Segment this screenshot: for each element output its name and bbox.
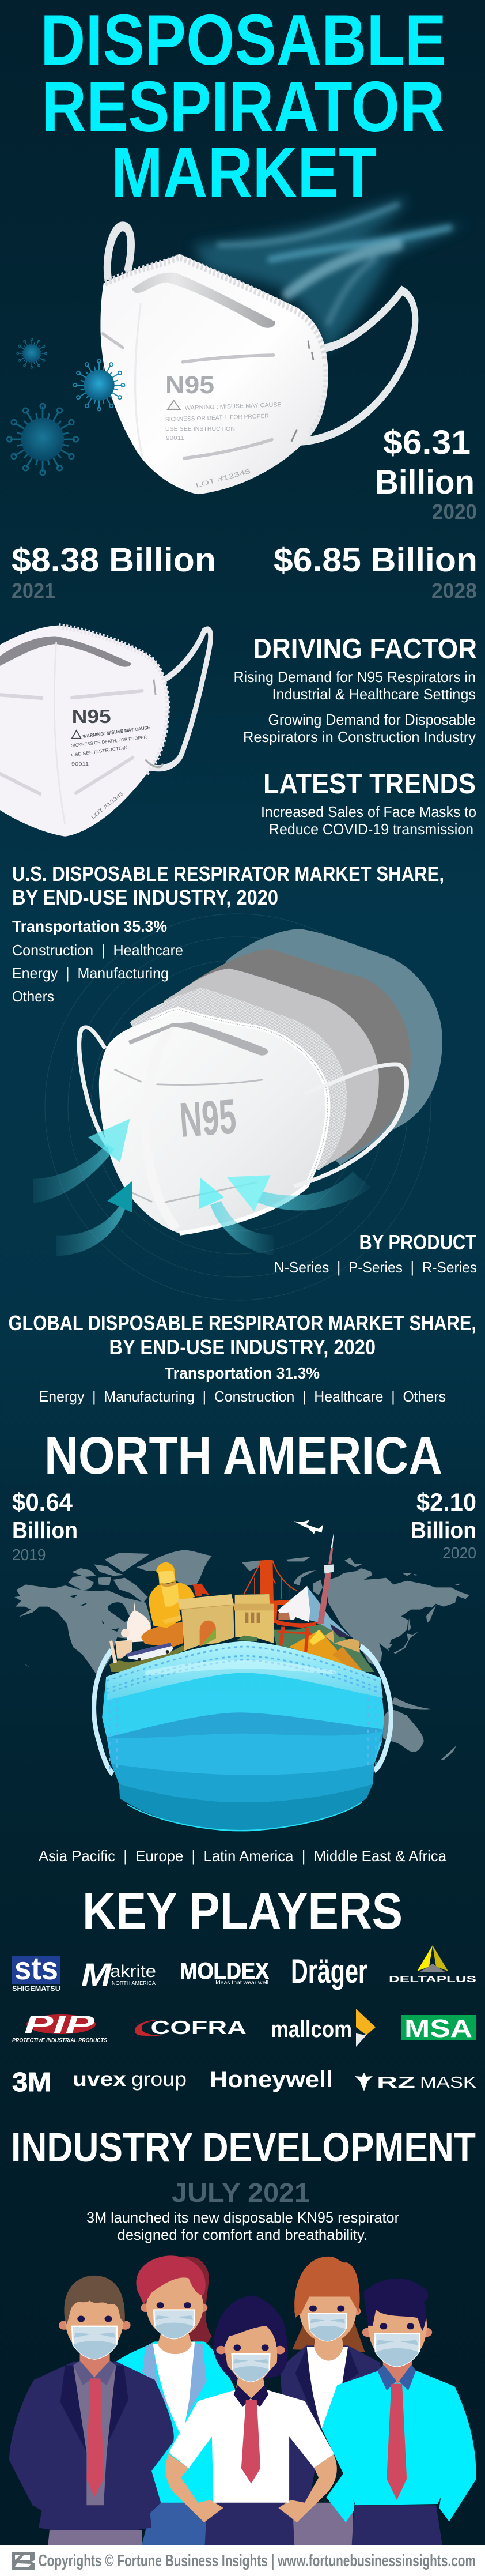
stat: North America 2019: $0.64	[12, 1489, 73, 1516]
logo: STS Shigematsu: SHIGEMATSU	[12, 1984, 60, 1993]
mask label: N95: N95	[178, 1089, 238, 1148]
illustration: blue surgical mask	[102, 1641, 384, 1831]
person: red-haired woman	[115, 2255, 235, 2545]
illustration: N95 mask close-up: WARNING: MISUSE MAY CAUSE	[82, 725, 151, 739]
mask layer: grey filter	[164, 969, 379, 1168]
driving factor: Rising Demand for N95 Respirators in	[234, 668, 476, 686]
ear loop: right	[294, 1064, 407, 1187]
legend: global end-use industries: Energy | Manufacturing | Construction | Healthcare | Others	[39, 1388, 446, 1405]
concentric airflow rings	[45, 914, 431, 1300]
stat: North America 2019: Billion	[12, 1517, 78, 1543]
person: woman in white shirt	[165, 2295, 337, 2545]
stat: 2021 market size: $8.38 Billion	[12, 541, 216, 579]
arrow: airflow upper left	[33, 1118, 130, 1203]
logo: uvex group	[73, 2068, 187, 2091]
landmark: Great Wall	[324, 1630, 360, 1653]
illustration: hero N95 mask: WARNING : MISUSE MAY CAUSE	[185, 401, 282, 412]
icon: virus small	[17, 338, 47, 368]
person: orange-haired woman	[280, 2257, 381, 2545]
arrow: airflow bottom centre	[199, 1178, 274, 1255]
mask body: front layer	[99, 1010, 328, 1233]
development description	[86, 2209, 399, 2243]
arrow: airflow bottom right	[227, 1172, 371, 1211]
legend: U.S. end-use industries: Others	[12, 988, 54, 1005]
logo: PIP	[12, 2010, 107, 2044]
development description: 3M launched its new disposable KN95 respirator	[86, 2209, 399, 2226]
illustration: N95 mask close-up: N95	[72, 706, 111, 727]
illustration: hero N95 mask: USE SEE INSTRUCTION	[165, 425, 235, 432]
stat: North America 2020: $2.10	[416, 1489, 476, 1516]
landmark: hills right	[272, 1623, 374, 1672]
landmark: small red bridge	[192, 1584, 209, 1596]
stat: North America 2019	[12, 1489, 78, 1564]
logo: uvex group: uvex	[73, 2068, 127, 2091]
stat: North America 2020: Billion	[411, 1517, 476, 1543]
person: man in cyan shirt	[321, 2279, 476, 2545]
map: Greenland and Northern Europe	[137, 1550, 323, 1595]
logo: Delta Plus	[389, 1945, 477, 1984]
logo: Cofra	[135, 2017, 247, 2038]
region list: Asia Pacific | Europe | Latin America | Middle East & Africa	[39, 1847, 447, 1865]
logo: Makrite: NORTH AMERICA	[112, 1980, 156, 1987]
illustration: N95 mask close-up: 90011	[71, 762, 89, 767]
landmark: Golden Gate bridge	[244, 1560, 297, 1623]
heading: North America: NORTH AMERICA	[44, 1426, 442, 1485]
logo: Delta Plus: DELTAPLUS	[389, 1975, 477, 1984]
logo: PIP: PROTECTIVE INDUSTRIAL PRODUCTS	[12, 2037, 107, 2044]
stat: 2021 market size: 2021	[12, 579, 55, 602]
logo: uvex group: group	[131, 2068, 187, 2091]
footer bar	[0, 2545, 485, 2576]
landmark: communication tower	[317, 1531, 334, 1624]
logo: Moldex: Ideas that wear well	[215, 1979, 268, 1986]
logo: RZ Mask: MASK	[420, 2073, 476, 2091]
logo: PIP: PIP	[24, 2010, 95, 2039]
latest trends: Increased Sales of Face Masks to	[261, 803, 476, 820]
illustration: hero N95 mask: SICKNESS OR DEATH, FOR PROPER	[165, 413, 269, 423]
illustration: hero N95 mask: LOT #12345	[195, 468, 251, 489]
illustration: hero N95 mask: N95	[165, 371, 214, 399]
latest trends	[261, 769, 476, 838]
landmark: tour bus	[126, 1643, 173, 1661]
title	[40, 1, 446, 213]
stat: 2020 market size	[375, 424, 477, 524]
landmark: greenery left	[109, 1645, 184, 1672]
landmark: pyramids	[289, 1630, 363, 1671]
logo: Makrite: akrite	[110, 1962, 156, 1981]
logo: Cofra: COFRA	[151, 2017, 247, 2038]
driving factor	[234, 634, 477, 745]
legend: global end-use industries	[39, 1364, 446, 1405]
stat: 2028 market size: 2028	[431, 579, 477, 602]
development description: designed for comfort and breathability.	[118, 2226, 367, 2243]
logo: Mallcom: mallcom	[271, 2017, 352, 2042]
map: Americas and Arctic islands	[14, 1553, 151, 1674]
icon: virus large	[7, 404, 78, 475]
illustration: layered respirator	[33, 929, 442, 1256]
illustration: team wearing masks	[9, 2255, 476, 2545]
icon: airplane	[294, 1520, 323, 1534]
logo: 3M: 3M	[12, 2067, 51, 2097]
logo: Draeger: Dräger	[291, 1953, 367, 1990]
icon: virus medium	[73, 359, 125, 411]
legend: U.S. end-use industries	[12, 917, 183, 1005]
stat: North America 2020: 2020	[442, 1544, 476, 1562]
heading: key players: KEY PLAYERS	[82, 1882, 403, 1939]
logo: Makrite	[81, 1956, 156, 1993]
illustration: hero N95 mask	[100, 227, 415, 494]
legend: U.S. end-use industries: Energy | Manufacturing	[12, 965, 169, 982]
logo: STS Shigematsu: sts	[14, 1950, 58, 1986]
logo: Honeywell: Honeywell	[210, 2067, 333, 2092]
stat: 2028 market size: $6.85 Billion	[274, 541, 478, 579]
illustration: N95 mask close-up: USE SEE INSTRUCTOIN.	[71, 745, 129, 758]
mask layer: mesh filter	[130, 988, 347, 1170]
mask ear loops	[94, 1647, 391, 1774]
heading: U.S. market share: BY END-USE INDUSTRY, 2020	[12, 886, 278, 909]
heading: global market share: BY END-USE INDUSTRY, 2020	[109, 1335, 376, 1359]
stat: North America 2020	[411, 1489, 476, 1562]
stat: North America 2019: 2019	[12, 1546, 46, 1564]
driving factor: Industrial & Healthcare Settings	[272, 686, 476, 703]
illustration: N95 mask close-up: LOT #12345	[90, 790, 125, 820]
arrow: airflow lower left	[56, 1181, 132, 1256]
stat: 2020 market size: $6.31	[383, 424, 471, 461]
illustration: hero N95 mask: 90011	[166, 435, 184, 442]
illustration: N95 mask close-up	[0, 626, 211, 837]
legend: U.S. end-use industries: Transportation 35.3%	[12, 917, 167, 935]
legend: U.S. end-use industries: Construction | Healthcare	[12, 941, 183, 959]
title: MARKET	[111, 133, 377, 213]
illustration: N95 mask close-up: SICKNESS OR DEATH, FOR PROPER	[71, 735, 147, 748]
mask layer: outer filter	[217, 929, 442, 1165]
logo: Mallcom	[271, 2009, 376, 2047]
ear loop: left	[79, 1027, 108, 1147]
driving factor: Growing Demand for Disposable	[268, 711, 476, 728]
stat: 2020 market size: 2020	[432, 500, 477, 524]
landmark: Buddha	[141, 1562, 195, 1647]
heading: U.S. market share	[12, 862, 444, 909]
map: Asia	[328, 1558, 469, 1666]
stat: 2020 market size: Billion	[375, 464, 475, 501]
person: man in navy suit	[9, 2276, 174, 2545]
landmark: triumphal arch	[177, 1594, 234, 1651]
logo: MSA: MSA	[404, 2014, 472, 2043]
map: Oceania	[383, 1697, 456, 1760]
landmark: Taj Mahal	[109, 1602, 151, 1663]
landmark: snowy mountain	[278, 1586, 351, 1637]
stat: 2021 market size	[12, 541, 216, 602]
landmark: torii gate	[274, 1613, 317, 1652]
logo: Makrite: M	[81, 1956, 112, 1993]
landmarks on the mask	[109, 1531, 374, 1672]
date: July 2021: JULY 2021	[172, 2178, 310, 2208]
world map	[14, 1550, 469, 1760]
driving factor: Respirators in Construction Industry	[243, 728, 476, 745]
icon: Fortune Business Insights logo	[12, 2552, 35, 2570]
logo: Moldex: MOLDEX	[180, 1959, 269, 1984]
latest trends: Reduce COVID-19 transmission	[269, 820, 473, 838]
by product	[274, 1230, 477, 1276]
legend: global end-use industries: Transportation 31.3%	[165, 1364, 320, 1382]
logo: RZ Mask	[355, 2073, 476, 2091]
heading: global market share	[8, 1311, 476, 1359]
mask layer: dark filter	[192, 949, 411, 1170]
landmark: classical building	[233, 1594, 274, 1643]
by product: N-Series | P-Series | R-Series	[274, 1259, 477, 1276]
logo: RZ Mask: RZ	[377, 2073, 415, 2091]
stat: 2028 market size	[274, 541, 478, 602]
breath wisps behind mask	[193, 197, 468, 353]
